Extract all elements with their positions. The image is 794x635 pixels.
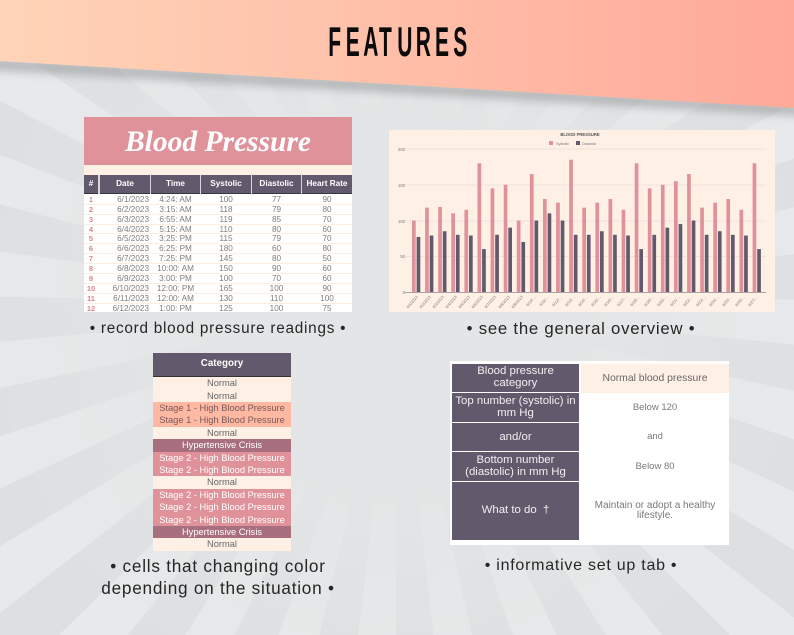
table rows: 60 bbox=[272, 244, 281, 253]
category cells: Normal bbox=[207, 539, 237, 549]
table rows: 6/11/2023 bbox=[113, 294, 149, 303]
x axis labels: 6/2/2023 bbox=[418, 294, 432, 309]
table rows: 50 bbox=[322, 254, 332, 263]
chart title: BLOOD PRESSURE bbox=[560, 132, 600, 137]
table rows: 7 bbox=[89, 254, 93, 263]
table rows: 70 bbox=[322, 215, 332, 224]
chart legend bbox=[549, 141, 596, 146]
table rows: 6:25: PM bbox=[159, 244, 192, 253]
x axis labels: 6/25/… bbox=[721, 294, 733, 307]
table rows: 11 bbox=[87, 294, 95, 303]
table rows: 3:15: AM bbox=[159, 205, 192, 214]
diastolic bars bbox=[417, 213, 761, 292]
table rows: 3:25: PM bbox=[159, 234, 192, 243]
caption: record readings: • record blood pressure readings • bbox=[90, 320, 346, 337]
caption: changing color cells bbox=[101, 556, 335, 598]
table rows: 100 bbox=[219, 195, 233, 204]
x axis labels: 6/4/2023 bbox=[444, 294, 458, 309]
category cells: Normal bbox=[207, 428, 237, 438]
y axis labels: 0 bbox=[403, 290, 406, 295]
table rows: 1 bbox=[89, 195, 93, 204]
value: and: and bbox=[647, 431, 663, 442]
value: what to do bbox=[595, 500, 716, 521]
table rows: 9 bbox=[89, 274, 93, 283]
category cells: Stage 1 - High Blood Pressure bbox=[159, 403, 285, 413]
table rows: 145 bbox=[219, 254, 233, 263]
category header bbox=[153, 353, 291, 377]
table rows: 118 bbox=[219, 205, 233, 214]
table rows: 150 bbox=[219, 264, 233, 273]
table header: Diastolic bbox=[259, 179, 294, 188]
table header: Heart Rate bbox=[307, 179, 347, 188]
category cells: Normal bbox=[207, 477, 237, 487]
table rows: 80 bbox=[272, 254, 281, 263]
x axis labels: 6/13/… bbox=[564, 294, 576, 307]
row: systolic: mm Hg bbox=[497, 406, 534, 418]
table rows: 12:00: PM bbox=[157, 284, 194, 293]
table rows: 90 bbox=[272, 264, 281, 273]
systolic bars bbox=[412, 160, 756, 292]
table rows: 3 bbox=[89, 215, 93, 224]
x axis labels: 6/19/… bbox=[643, 294, 655, 307]
table rows: 7:25: PM bbox=[159, 254, 192, 263]
table rows: 6/6/2023 bbox=[117, 244, 149, 253]
value: category bbox=[581, 364, 729, 393]
table rows: 6/9/2023 bbox=[117, 274, 149, 283]
table rows: 77 bbox=[272, 195, 281, 204]
table header: Systolic bbox=[210, 179, 242, 188]
y axis labels bbox=[398, 147, 406, 295]
x axis labels: 6/26/… bbox=[734, 294, 746, 307]
table rows: 2 bbox=[89, 205, 93, 214]
x axis labels bbox=[405, 294, 759, 309]
table rows: 90 bbox=[322, 284, 332, 293]
y axis labels: 50 bbox=[400, 254, 406, 259]
table rows: 70 bbox=[322, 234, 332, 243]
category cells: Stage 2 - High Blood Pressure bbox=[159, 502, 285, 512]
row: diastolic: Bottom number bbox=[477, 454, 554, 466]
table rows: 115 bbox=[219, 234, 233, 243]
category header: Category bbox=[201, 358, 243, 369]
caption: changing color cells: depending on the situation • bbox=[101, 578, 335, 598]
table rows: 79 bbox=[272, 205, 281, 214]
table rows: 6/2/2023 bbox=[117, 205, 149, 214]
x axis labels: 6/22/… bbox=[682, 294, 694, 307]
row: what to do bbox=[452, 482, 579, 540]
category cells: Stage 2 - High Blood Pressure bbox=[159, 465, 285, 475]
chart legend: Diastolic bbox=[582, 142, 596, 146]
table rows: 80 bbox=[272, 225, 281, 234]
table rows: 4 bbox=[89, 225, 93, 234]
y axis labels: 100 bbox=[398, 219, 406, 224]
row: category: category bbox=[494, 377, 537, 389]
category cells: Stage 2 - High Blood Pressure bbox=[159, 515, 285, 525]
x axis labels: 6/14/… bbox=[577, 294, 589, 307]
row: and/or bbox=[452, 423, 579, 451]
x axis labels: 6/3/2023 bbox=[431, 294, 445, 309]
category cells bbox=[153, 377, 291, 551]
category cells: Hypertensive Crisis bbox=[182, 440, 262, 450]
y axis labels: 200 bbox=[398, 147, 406, 152]
table rows: 85 bbox=[272, 215, 281, 224]
table rows: 100 bbox=[270, 284, 283, 293]
table rows: 6/7/2023 bbox=[117, 254, 149, 263]
value: category: Normal blood pressure bbox=[602, 372, 708, 384]
table header: Time bbox=[166, 179, 185, 188]
table rows: 6/4/2023 bbox=[117, 225, 149, 234]
x axis labels: 6/6/2023 bbox=[470, 294, 484, 309]
category cells: Stage 1 - High Blood Pressure bbox=[159, 415, 285, 425]
value: systolic: Below 120 bbox=[633, 402, 677, 412]
table rows: 79 bbox=[272, 234, 281, 243]
table rows: 110 bbox=[270, 294, 283, 303]
table rows: 70 bbox=[272, 274, 281, 283]
title: FEATURES bbox=[328, 19, 467, 65]
category cells: Stage 2 - High Blood Pressure bbox=[159, 490, 285, 500]
table header: Date bbox=[116, 179, 134, 188]
table rows: 6:55: AM bbox=[159, 215, 192, 224]
row: category bbox=[452, 364, 579, 392]
table rows: 110 bbox=[219, 225, 233, 234]
x axis labels: 6/12/… bbox=[551, 294, 563, 307]
table rows: 60 bbox=[322, 225, 332, 234]
table rows: 100 bbox=[320, 294, 334, 303]
cream spacer bbox=[84, 165, 352, 175]
table rows: 8 bbox=[89, 264, 93, 273]
table rows: 80 bbox=[322, 244, 332, 253]
table rows: 80 bbox=[322, 205, 332, 214]
panel: blood pressure log table bbox=[84, 117, 352, 312]
value: what to do: lifestyle. bbox=[637, 510, 673, 521]
caption: changing color cells: • cells that changing color bbox=[110, 556, 326, 576]
x axis labels: 6/27/… bbox=[747, 294, 759, 307]
caption: setup tab: • informative set up tab • bbox=[485, 557, 677, 574]
table rows: 5:15: AM bbox=[159, 225, 192, 234]
category cells: Stage 2 - High Blood Pressure bbox=[159, 453, 285, 463]
table rows: 6 bbox=[89, 244, 93, 253]
table rows: 6/8/2023 bbox=[117, 264, 149, 273]
table rows: 12:00: AM bbox=[157, 294, 194, 303]
x axis labels: 6/18/… bbox=[629, 294, 641, 307]
panel: category column bbox=[153, 353, 291, 551]
table rows: 6/1/2023 bbox=[117, 195, 149, 204]
value: what to do: Maintain or adopt a healthy bbox=[595, 500, 715, 511]
x axis labels: 6/11/… bbox=[538, 294, 550, 307]
category cells: Normal bbox=[207, 378, 237, 388]
row: and/or: and/or bbox=[499, 431, 532, 443]
table header bbox=[84, 175, 352, 194]
row: systolic: Top number (systolic) in bbox=[455, 395, 576, 407]
table rows: 100 bbox=[219, 274, 233, 283]
x axis labels: 6/7/2023 bbox=[483, 294, 497, 309]
table title bbox=[84, 117, 352, 165]
x axis labels: 6/9/2023 bbox=[510, 294, 524, 309]
table title: Blood Pressure bbox=[125, 126, 311, 158]
panel background bbox=[450, 361, 729, 545]
x axis labels: 6/21/… bbox=[669, 294, 681, 307]
table rows: 10 bbox=[87, 284, 95, 293]
caption: general overview: • see the general overview • bbox=[467, 319, 695, 338]
table rows: 90 bbox=[322, 195, 332, 204]
x axis labels: 6/5/2023 bbox=[457, 294, 471, 309]
table rows: 3:00: PM bbox=[159, 274, 192, 283]
x axis labels: 6/15/… bbox=[590, 294, 602, 307]
table rows: 165 bbox=[219, 284, 233, 293]
table rows: 6/5/2023 bbox=[117, 234, 149, 243]
x axis labels: 6/1/2023 bbox=[405, 294, 419, 309]
x axis labels: 6/23/… bbox=[695, 294, 707, 307]
y axis labels: 150 bbox=[398, 183, 406, 188]
chart legend: Systolic bbox=[556, 142, 569, 146]
x axis labels: 6/17/… bbox=[616, 294, 628, 307]
table header: # bbox=[89, 179, 93, 188]
row: systolic bbox=[452, 393, 579, 422]
table rows: 180 bbox=[219, 244, 233, 253]
row: diastolic: (diastolic) in mm Hg bbox=[465, 466, 566, 478]
x axis labels: 6/10/… bbox=[525, 294, 537, 307]
table rows: 119 bbox=[219, 215, 233, 224]
table rows: 6/10/2023 bbox=[113, 284, 149, 293]
x axis labels: 6/24/… bbox=[708, 294, 720, 307]
panel: bar chart bbox=[389, 130, 775, 312]
category cells: Normal bbox=[207, 391, 237, 401]
row: category: Blood pressure bbox=[477, 365, 554, 377]
table rows: 10:00: AM bbox=[157, 264, 194, 273]
table rows: 130 bbox=[219, 294, 233, 303]
table rows: 60 bbox=[322, 274, 332, 283]
row: diastolic bbox=[452, 452, 579, 481]
table rows: 5 bbox=[89, 234, 93, 243]
x axis labels: 6/16/… bbox=[603, 294, 615, 307]
x axis labels: 6/8/2023 bbox=[497, 294, 511, 309]
x axis labels: 6/20/… bbox=[656, 294, 668, 307]
banner bbox=[0, 0, 794, 120]
value: diastolic: Below 80 bbox=[635, 460, 675, 472]
table rows: 6/3/2023 bbox=[117, 215, 149, 224]
table rows: 4:24: AM bbox=[159, 195, 192, 204]
table rows bbox=[84, 195, 352, 312]
category cells: Hypertensive Crisis bbox=[182, 527, 262, 537]
row: what to do: What to do † bbox=[482, 504, 549, 516]
table rows: 60 bbox=[322, 264, 332, 273]
